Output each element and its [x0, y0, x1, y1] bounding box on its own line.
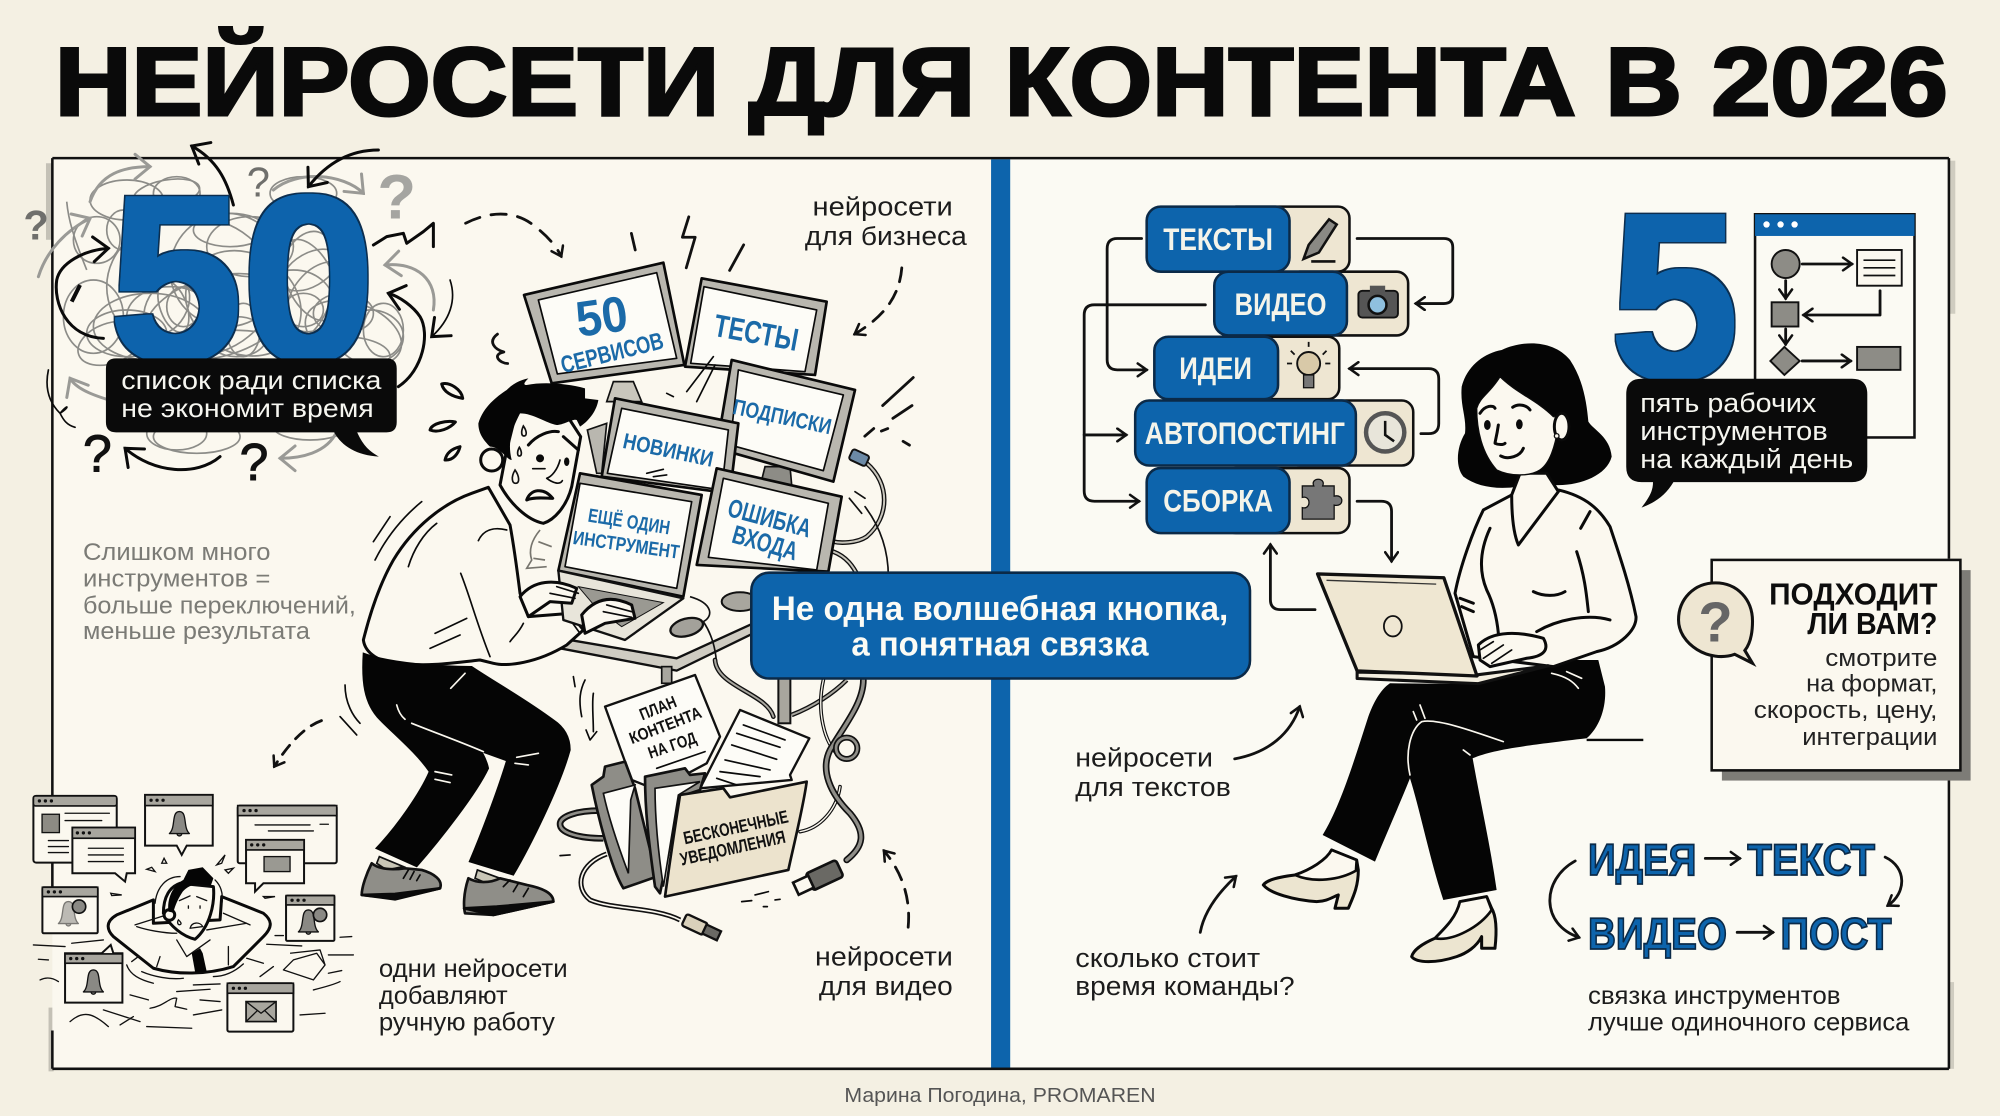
tool stack	[1135, 207, 1413, 533]
monitor: тесты: ТЕСТЫ	[711, 307, 801, 358]
callout card: подходит ли вам: ПОДХОДИТ	[1769, 578, 1938, 612]
woman: face	[1477, 377, 1558, 475]
caption: нейросети для текстов	[1075, 745, 1231, 802]
man: left shoe	[362, 863, 441, 898]
dashed arrow to monitors	[466, 214, 561, 256]
mouse	[668, 615, 705, 640]
black speech bubble: список ради списка: список ради списка	[121, 365, 382, 395]
man: flying sweat drops	[430, 384, 463, 460]
tool: тексты: ТЕКСТЫ	[1163, 221, 1273, 257]
man: face	[500, 410, 581, 523]
dashed arrow from video caption	[884, 851, 909, 927]
monitor: ещё один инструмент	[558, 473, 702, 597]
cables behind folders	[715, 660, 863, 860]
caption: сколько стоит: время команды?	[1075, 973, 1295, 1001]
dashed arrow from business caption	[855, 268, 902, 334]
folders, papers and cables	[560, 660, 863, 942]
caption: нейросети для бизнеса: для бизнеса	[805, 223, 968, 251]
monitor: ошибка входа: ВХОДА	[729, 519, 801, 566]
desk leg and brace	[662, 667, 847, 723]
central blue callout: а понятная связка	[851, 626, 1149, 664]
grey scribble tangle	[63, 174, 411, 453]
monitor: тесты	[685, 278, 827, 375]
cables by monitors	[833, 449, 888, 577]
tool: идеи	[1154, 337, 1339, 399]
caption: связка инструментов: связка инструментов	[1588, 982, 1841, 1010]
lined paper	[700, 710, 809, 788]
monitor: новинки: НОВИНКИ	[621, 428, 716, 472]
blue center divider	[991, 159, 1010, 1068]
icon: puzzle piece	[1302, 479, 1342, 519]
question marks: ?	[83, 425, 112, 483]
woman: right shoe	[1412, 897, 1496, 962]
big number 5: 5	[1611, 166, 1738, 428]
black speech bubble: пять рабочих	[1626, 379, 1867, 508]
caption: нейросети для бизнеса	[805, 194, 968, 251]
monitor: подписки	[717, 360, 855, 485]
middle folder	[645, 768, 705, 893]
man: hair	[478, 378, 598, 460]
window with envelope	[227, 983, 293, 1032]
monitor: подписки: ПОДПИСКИ	[731, 394, 834, 439]
folder: бесконечные уведомления: УВЕДОМЛЕНИЯ	[678, 827, 787, 869]
icon: clock	[1366, 413, 1404, 452]
caption: сколько стоит: сколько стоит	[1075, 945, 1261, 973]
man: right shoe	[464, 878, 553, 915]
window with faded bell	[42, 887, 98, 933]
folder: бесконечные уведомления: БЕСКОНЕЧНЫЕ	[682, 807, 790, 848]
pipeline: идея текст видео пост: ИДЕЯ	[1588, 836, 1696, 885]
text: too many tools: инструментов =	[83, 566, 270, 593]
computer workstation with monitors and man	[524, 263, 888, 671]
caption: нейросети для текстов: для текстов	[1075, 774, 1231, 802]
caption: нейросети для видео: нейросети	[815, 943, 953, 971]
icon: question bubble	[1679, 583, 1753, 663]
callout card: подходит ли вам: интеграции	[1802, 724, 1937, 750]
desk	[560, 623, 753, 671]
folder handle loop	[560, 811, 603, 838]
monitor: ошибка входа	[697, 468, 842, 572]
motion marks and dashes	[560, 677, 780, 907]
text: too many tools: Слишком много	[83, 539, 270, 566]
tool: видео	[1214, 272, 1408, 335]
tool: автопостинг	[1135, 400, 1413, 466]
window with document	[33, 796, 117, 863]
monitor: ещё один инструмент: ИНСТРУМЕНТ	[572, 528, 681, 564]
monitor: ещё один инструмент: ЕЩЁ ОДИН	[586, 504, 672, 539]
arrow from cost caption	[1200, 876, 1236, 932]
woman: left shoe	[1263, 850, 1358, 908]
front monitor, keyboard and hands	[520, 473, 717, 670]
caption: нейросети для текстов: нейросети	[1075, 745, 1213, 773]
chaos scribbles and arrows around 50	[23, 146, 453, 491]
black speech bubble: пять рабочих: пять рабочих	[1640, 388, 1817, 418]
water ripples	[33, 936, 353, 1028]
paper: план контента на год: КОНТЕНТА	[627, 703, 704, 748]
workflow window	[1755, 214, 1914, 437]
caption: одни нейросети: ручную работу	[379, 1009, 555, 1037]
man: upper body	[363, 378, 598, 665]
window with message	[246, 840, 304, 892]
man: shirt	[363, 487, 583, 665]
black speech bubble: пять рабочих: на каждый день	[1640, 444, 1853, 474]
callout card: подходит ли вам: скорость, цену,	[1754, 697, 1937, 723]
paper: план контента на год: НА ГОД	[646, 728, 699, 763]
stress marks around monitors	[493, 217, 913, 445]
tool: сборка	[1147, 468, 1349, 533]
caption: одни нейросети	[379, 955, 568, 1037]
monitor: 50 сервисов: 50	[572, 285, 631, 348]
caption: связка инструментов	[1588, 982, 1910, 1037]
woman: ear	[1554, 413, 1569, 440]
black speech bubble: список ради списка	[106, 358, 397, 457]
notification windows and drowning person	[33, 795, 353, 1032]
caption: одни нейросети: добавляют	[379, 982, 508, 1010]
mouse cable	[690, 597, 717, 670]
callout card: подходит ли вам: на формат,	[1806, 670, 1937, 696]
laptop keyboard	[558, 571, 683, 640]
man: socks	[377, 857, 500, 883]
white cable with lower plug	[581, 854, 722, 942]
main panel frame	[46, 158, 1955, 1071]
question marks	[23, 159, 416, 491]
woman: hair	[1458, 343, 1612, 488]
crack marks between monitors	[667, 357, 715, 402]
text: too many tools: больше переключений,	[83, 592, 356, 619]
seated woman with laptop	[1263, 343, 1643, 962]
tool: видео: ВИДЕО	[1235, 286, 1327, 322]
man: motion lines by leg	[340, 685, 360, 735]
woman: face features	[1480, 405, 1530, 458]
folder: бесконечные уведомления	[665, 782, 807, 897]
black speech bubble: пять рабочих: инструментов	[1640, 416, 1828, 446]
tool: тексты	[1147, 207, 1349, 272]
footer credit: Марина Погодина, PROMAREN	[844, 1085, 1156, 1107]
big number 50: 50	[110, 148, 375, 410]
monitor stand and back panel	[587, 382, 642, 473]
dashed arrow to lower-left person	[274, 721, 321, 767]
woman: trousers	[1323, 660, 1605, 900]
text: too many tools	[83, 539, 356, 645]
window with alert bell	[286, 896, 334, 941]
window with list and tail	[72, 828, 135, 882]
monitor: 50 сервисов	[524, 263, 684, 383]
woman: upper body	[1455, 343, 1636, 667]
woman: blouse	[1455, 487, 1636, 667]
arrow from texts caption	[1235, 707, 1300, 759]
man: sweat on face	[512, 426, 526, 483]
window with bell lower	[65, 945, 122, 1003]
woman: laptop	[1318, 574, 1548, 684]
man: ear	[481, 449, 503, 471]
woman: hand	[1478, 633, 1546, 667]
paper: план контента на год	[605, 675, 720, 790]
text: too many tools: меньше результата	[83, 618, 311, 645]
monitor: 50 сервисов: СЕРВИСОВ	[558, 328, 666, 379]
floating paper debris	[283, 950, 325, 980]
man: face features	[528, 431, 578, 450]
black speech bubble: список ради списка: не экономит время	[121, 393, 374, 423]
pipeline: идея текст видео пост: ПОСТ	[1781, 910, 1892, 959]
icon: question bubble: ?	[1698, 591, 1733, 654]
tool: сборка: СБОРКА	[1163, 482, 1273, 518]
caption: сколько стоит	[1075, 945, 1295, 1001]
icon: pen	[1304, 219, 1337, 261]
woman: seat line	[1587, 736, 1643, 743]
pipeline: идея текст видео пост: ТЕКСТ	[1747, 836, 1875, 885]
monitor base disc	[722, 592, 758, 611]
woman: neckline	[1512, 473, 1558, 545]
caption: одни нейросети: одни нейросети	[379, 955, 568, 983]
question marks: ?	[23, 201, 49, 248]
pipeline: идея текст видео пост: ВИДЕО	[1588, 910, 1727, 959]
woman: legs	[1263, 660, 1643, 962]
title: НЕЙРОСЕТИ ДЛЯ КОНТЕНТА В 2026	[55, 27, 1948, 136]
back folder	[592, 762, 657, 888]
monitor: ошибка входа: ОШИБКА	[725, 492, 815, 543]
central blue callout: Не одна волшебная кнопка,	[772, 590, 1228, 628]
woman: blouse details	[1460, 512, 1610, 633]
central blue callout	[751, 573, 1250, 679]
pipeline: идея текст видео пост	[1550, 836, 1902, 959]
callout card: подходит ли вам: смотрите	[1825, 645, 1937, 671]
caption: нейросети для видео	[815, 943, 953, 1001]
callout card: подходит ли вам: ЛИ ВАМ?	[1807, 607, 1937, 641]
caption: нейросети для бизнеса: нейросети	[813, 194, 953, 222]
drowning person	[108, 855, 275, 973]
question marks: ?	[377, 162, 416, 232]
black arrows	[47, 146, 453, 470]
icon: camera	[1358, 286, 1398, 318]
icon: light bulb	[1287, 342, 1330, 388]
upper USB plug	[792, 860, 844, 897]
man: shirt details	[430, 529, 580, 657]
paper: план контента на год: ПЛАН	[637, 692, 679, 724]
man: odd chest mark	[527, 530, 552, 568]
caption: связка инструментов: лучше одиночного сервиса	[1588, 1009, 1910, 1037]
question marks: ?	[247, 159, 270, 206]
arrows between tools	[1084, 239, 1453, 610]
monitor: новинки	[602, 398, 738, 493]
man: hands	[520, 582, 635, 633]
window with bell	[145, 795, 213, 855]
caption: нейросети для видео: для видео	[819, 973, 953, 1001]
man: legs and shoes	[340, 653, 570, 915]
tool: автопостинг: АВТОПОСТИНГ	[1145, 415, 1345, 451]
grey arrows	[38, 167, 434, 458]
tool: идеи: ИДЕИ	[1179, 350, 1252, 386]
wide window	[238, 806, 337, 863]
question marks: ?	[240, 433, 268, 491]
callout card: подходит ли вам	[1679, 560, 1971, 781]
